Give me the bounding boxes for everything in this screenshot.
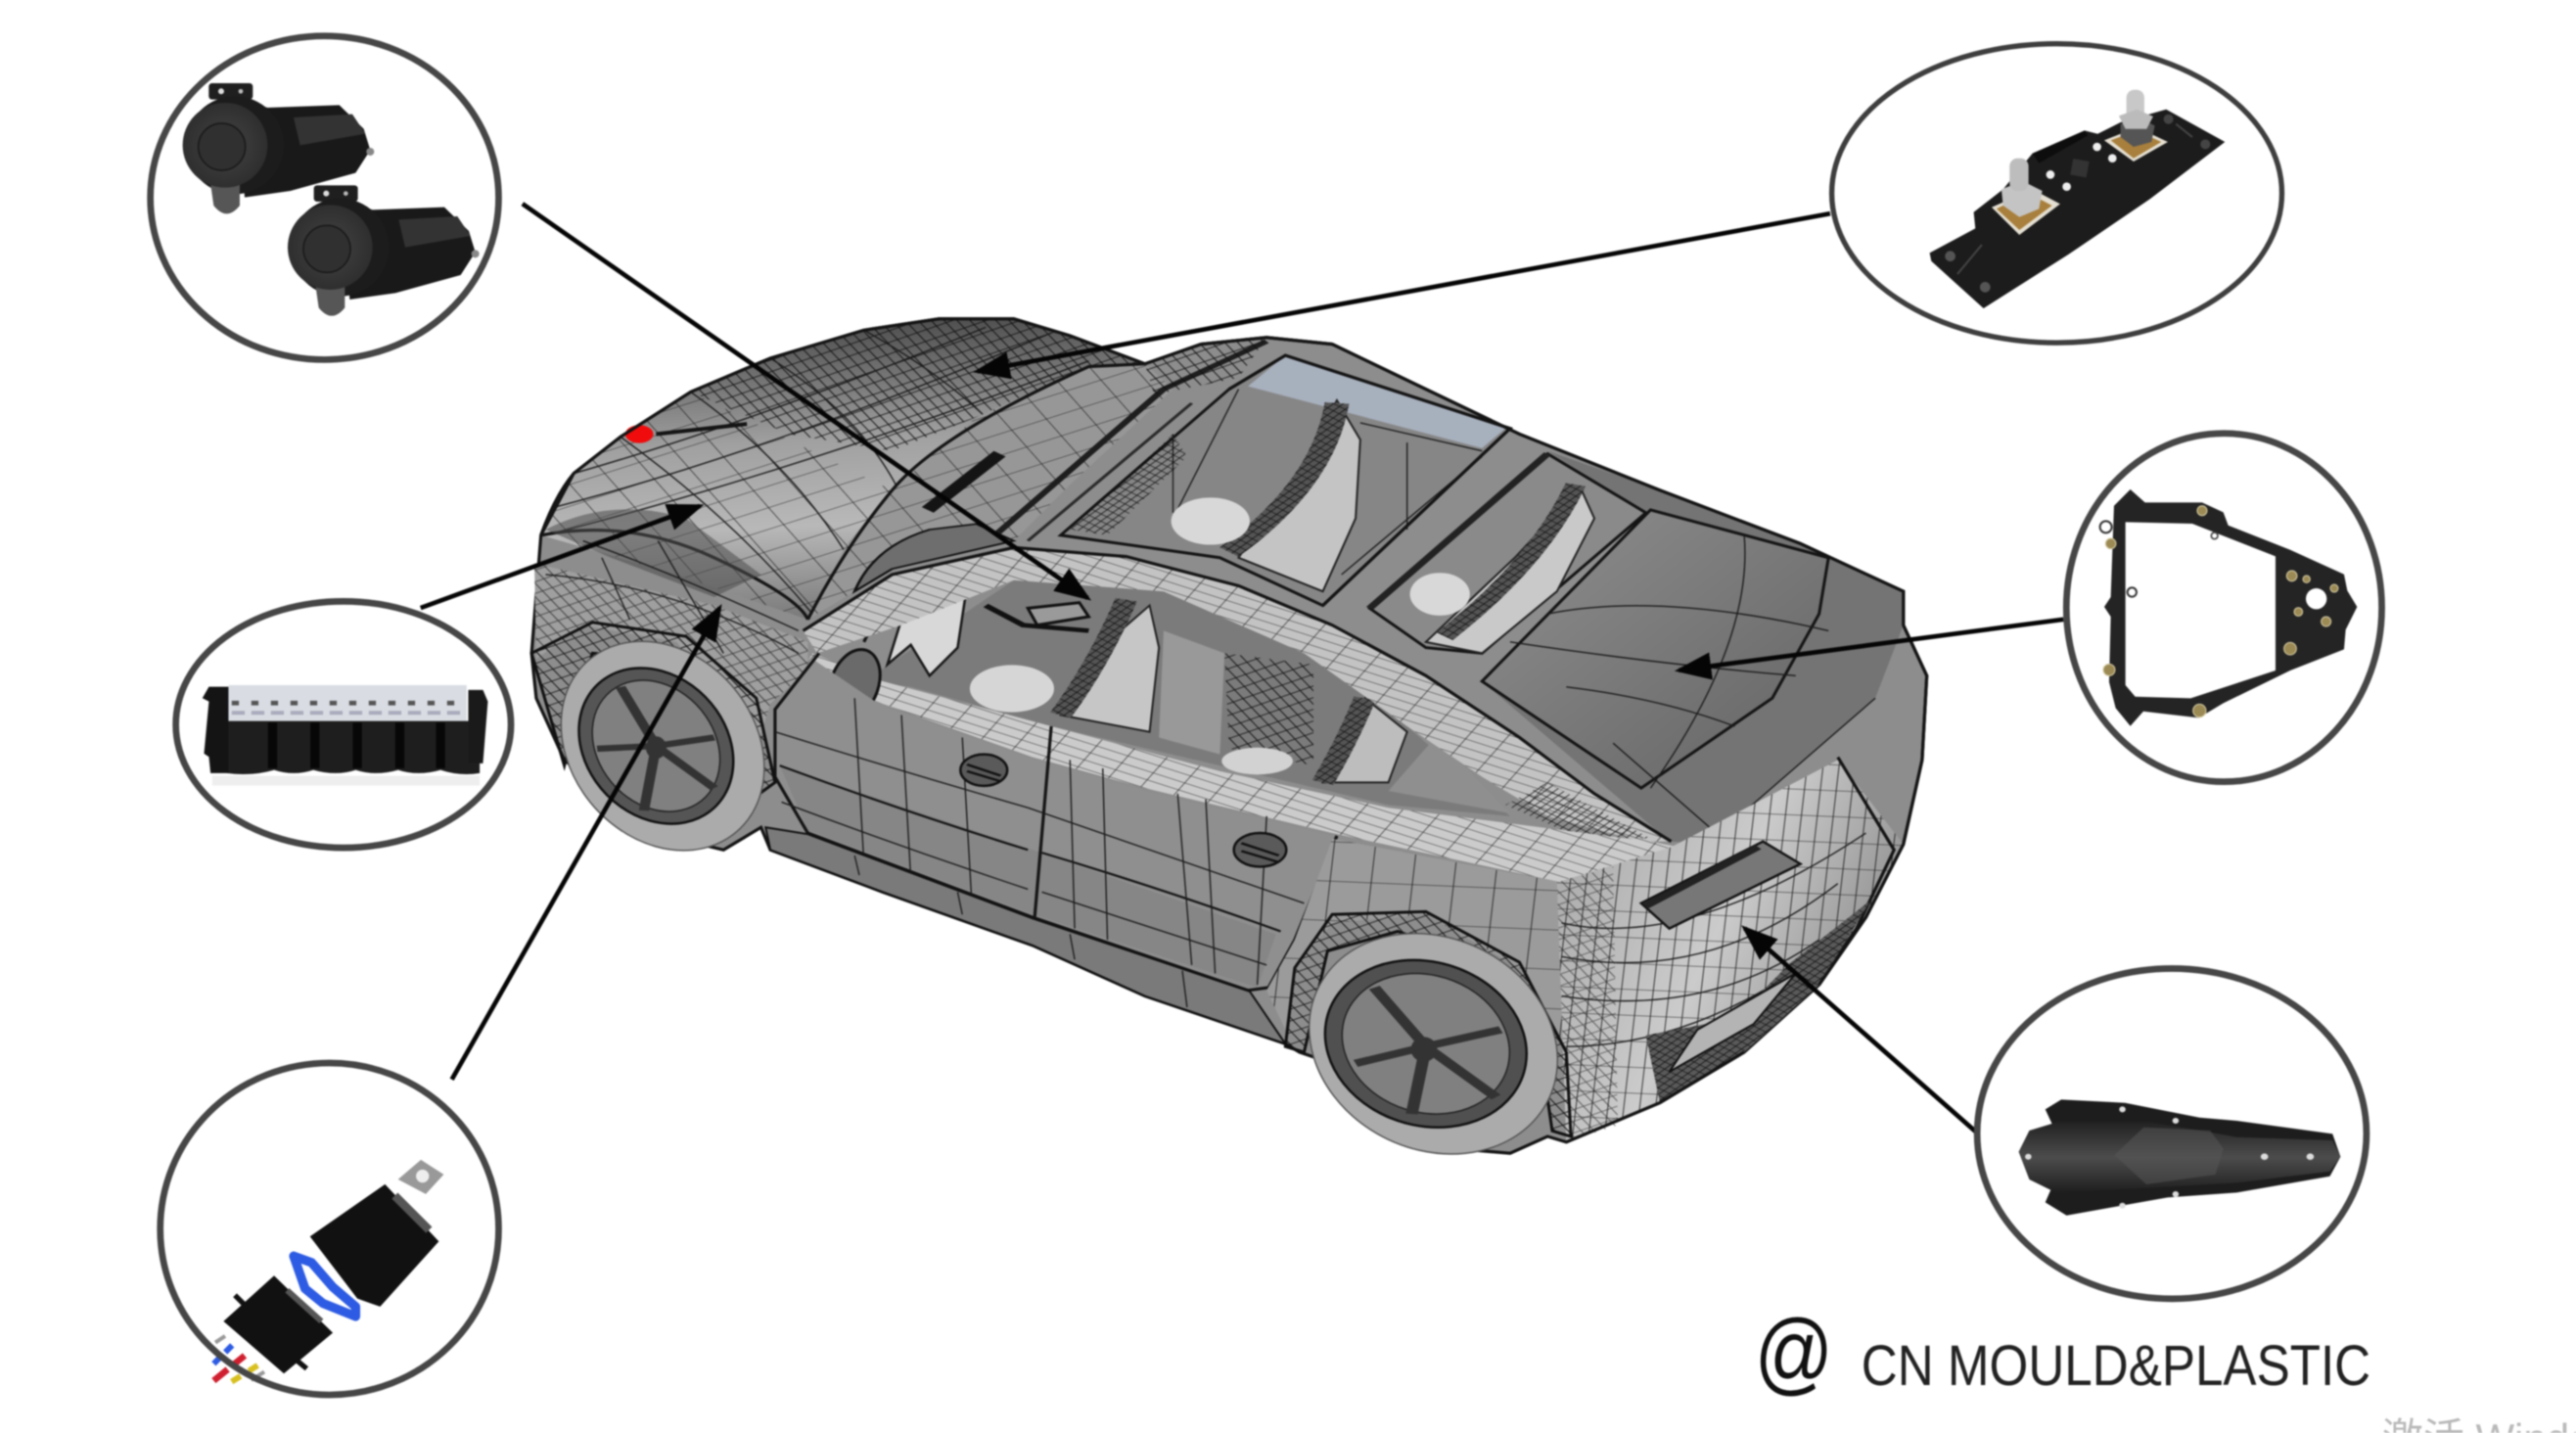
- rear window: [1482, 510, 1828, 788]
- ring: [151, 36, 498, 359]
- red marker: [625, 425, 654, 443]
- panel: relay and connector: [161, 1063, 498, 1395]
- rear fascia: [1557, 758, 1904, 1142]
- panel: plastic cover: [1977, 968, 2367, 1299]
- rear quarter panel: [1266, 839, 1566, 1052]
- ring: [2066, 434, 2382, 782]
- panel: battery cell holder: [176, 601, 511, 848]
- side mirror: [822, 648, 887, 720]
- arrow: sockets to console: [523, 204, 1087, 598]
- lower bumper grille: [1646, 901, 1870, 1103]
- front wheel: [531, 623, 790, 860]
- leader arrows: [421, 204, 2063, 1133]
- arrow: fuse holder to dash: [978, 213, 1830, 371]
- panel: mounting bracket: [2066, 434, 2382, 782]
- rear roof opening: [1369, 454, 1646, 653]
- icon: twin sockets: [183, 83, 480, 316]
- arrow: bracket to rear window: [1679, 620, 2063, 670]
- hood panel: [541, 319, 1145, 620]
- ring: [1977, 968, 2367, 1299]
- brand name: CN MOULD&PLASTIC: [1862, 1334, 2370, 1398]
- sky glass: [1248, 355, 1505, 448]
- door handle rear: [1234, 833, 1286, 866]
- centre console: [1028, 603, 1088, 625]
- car wireframe: [531, 319, 1927, 1166]
- roof rail band: [804, 547, 1671, 842]
- tail light: [1641, 842, 1801, 929]
- icon: cell holder: [203, 685, 487, 786]
- icon: relay: [213, 1160, 443, 1382]
- seat 4: [1221, 698, 1407, 782]
- ring: [176, 601, 511, 848]
- rear wheel: [1281, 911, 1586, 1166]
- arrow: cover to rear fascia: [1745, 928, 1978, 1133]
- doors: [775, 653, 1337, 991]
- rear roof panel: [1482, 451, 1904, 845]
- arrow: battery holder to hood: [421, 506, 700, 608]
- side window interior: [864, 580, 1510, 816]
- body outline: [541, 319, 1927, 985]
- sill: [765, 827, 1285, 1043]
- icon: bracket frame: [2100, 489, 2357, 726]
- belt line band: [804, 653, 1679, 883]
- car body silhouette: [531, 319, 1927, 1153]
- panel: fuse holder: [1832, 44, 2282, 343]
- seat 3: [970, 600, 1159, 732]
- arrow: relay to fender: [452, 608, 719, 1080]
- seat 1: [1172, 400, 1360, 591]
- ring: [1832, 44, 2282, 343]
- seat 2: [1410, 485, 1594, 653]
- icon: fuse holder: [1930, 90, 2225, 308]
- at sign: @: [1755, 1300, 1833, 1403]
- panel: power sockets: [151, 36, 498, 359]
- brand mark: [1755, 1300, 2370, 1403]
- door handle front: [960, 755, 1007, 786]
- ring: [161, 1063, 498, 1395]
- front fender: [534, 541, 807, 749]
- icon: underbody cover: [2019, 1099, 2340, 1216]
- steering wheel: [888, 585, 967, 675]
- front roof opening: [1061, 355, 1510, 606]
- cowl and dashboard top: [807, 338, 1266, 620]
